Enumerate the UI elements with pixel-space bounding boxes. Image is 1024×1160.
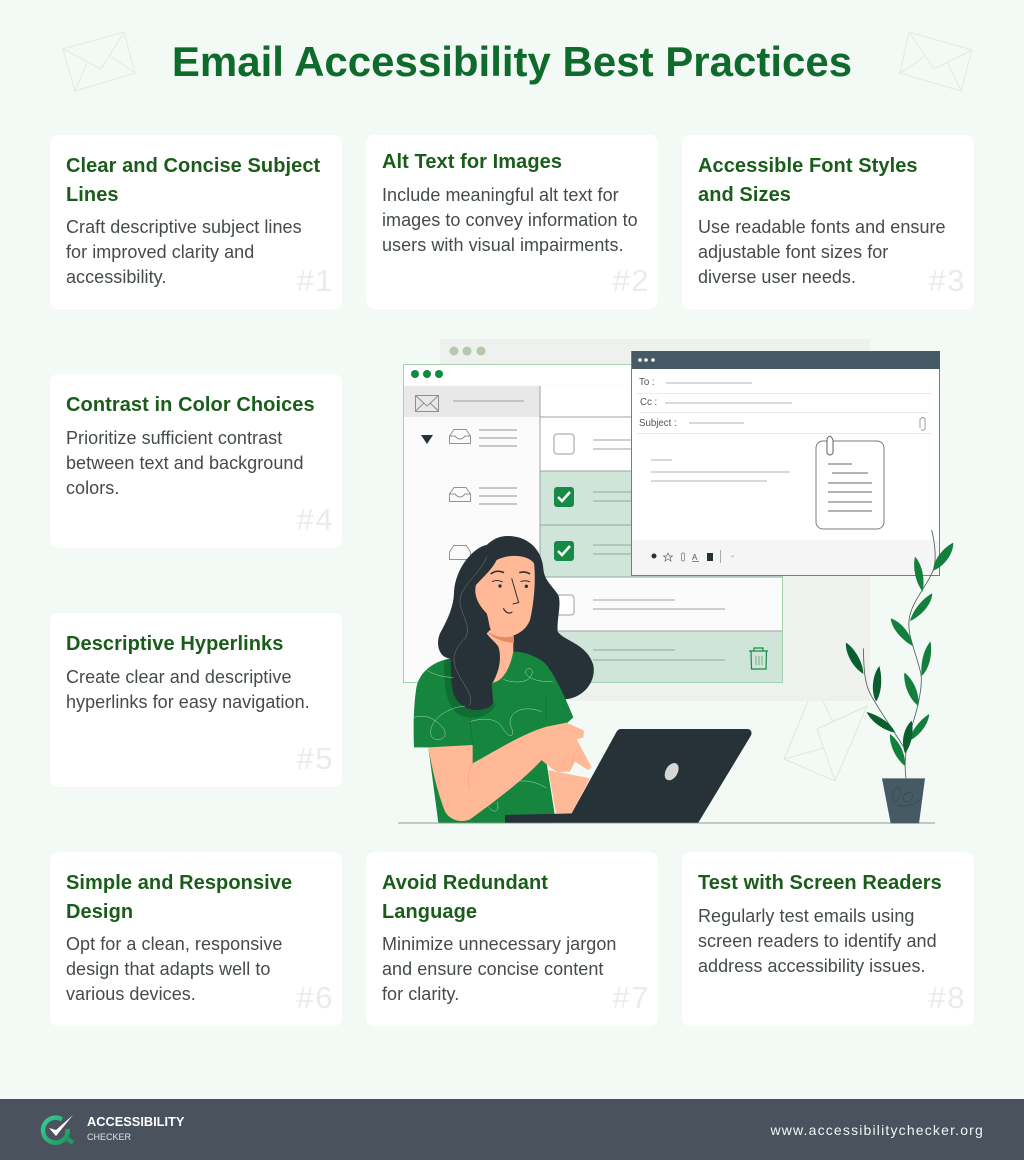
back forearm (548, 770, 590, 813)
card 8 number: #8 (929, 980, 966, 1015)
title: Email Accessibility Best Practices (172, 38, 852, 85)
footer bar (0, 1099, 1024, 1160)
card 4 number: #4 (297, 502, 334, 537)
neck shadow (487, 632, 514, 643)
panel: card 7 (366, 852, 658, 1026)
compose window: Subject : (639, 418, 677, 429)
card 5 number: #5 (297, 741, 334, 776)
neck (487, 630, 513, 683)
icon: envelope top right (900, 32, 972, 92)
shirt (414, 652, 573, 823)
logo wordmark: ACCESSIBILITY (87, 1114, 184, 1129)
card 3 heading: Accessible Font Styles (698, 155, 918, 177)
card 1 heading: Lines (66, 184, 119, 206)
card 3 body: diverse user needs. (698, 267, 856, 287)
compose toolbar: A (692, 553, 698, 562)
card 3 number: #3 (929, 263, 966, 298)
icon: trash (749, 648, 768, 669)
compose window: To : (639, 377, 655, 388)
main inbox window (404, 364, 782, 682)
rows lines (593, 440, 725, 660)
near arm (428, 723, 592, 821)
card 1 body: for improved clarity and (66, 242, 254, 262)
card 3 body (698, 217, 946, 287)
card 2 body: Include meaningful alt text for (382, 185, 619, 205)
website url: www.accessibilitychecker.org (770, 1122, 984, 1138)
card 6 body: design that adapts well to (66, 959, 270, 979)
card 6 number: #6 (297, 980, 334, 1015)
card 1 body (66, 217, 302, 287)
card 1 body: Craft descriptive subject lines (66, 217, 302, 237)
card 8 body (698, 906, 937, 976)
panel: card 1 (50, 135, 342, 309)
card 8 body: screen readers to identify and (698, 931, 937, 951)
card 3 body: Use readable fonts and ensure (698, 217, 946, 237)
card 6 body (66, 934, 282, 1004)
hair back (438, 536, 594, 711)
card 4 heading: Contrast in Color Choices (66, 394, 315, 416)
compose window (632, 351, 940, 576)
card 7 heading: Avoid Redundant (382, 872, 548, 894)
card 8 body: address accessibility issues. (698, 956, 926, 976)
checkbox checked (554, 541, 574, 561)
sidebar items (450, 430, 517, 560)
logo wordmark: CHECKER (87, 1132, 131, 1142)
icon: envelope top left (62, 32, 136, 92)
panel: card 4 (50, 374, 342, 548)
card 6 body: Opt for a clean, responsive (66, 934, 282, 954)
card 8 heading: Test with Screen Readers (698, 872, 942, 894)
checkbox empty (554, 434, 574, 454)
panel: card 5 (50, 613, 342, 787)
card 1 body: accessibility. (66, 267, 166, 287)
woman with laptop (414, 536, 752, 823)
card 3 body: adjustable font sizes for (698, 242, 888, 262)
face (475, 556, 535, 637)
card 7 heading (382, 872, 548, 923)
compose toolbar (652, 550, 734, 563)
card 7 body: Minimize unnecessary jargon (382, 934, 616, 954)
card 4 body (66, 428, 304, 498)
card 7 number: #7 (613, 980, 650, 1015)
back window (440, 339, 870, 701)
panel: card 3 (682, 135, 974, 309)
card 1 heading (66, 155, 320, 206)
card 3 heading (698, 155, 918, 206)
card 5 body: hyperlinks for easy navigation. (66, 692, 310, 712)
card 6 heading: Design (66, 901, 133, 923)
card 7 body (382, 934, 616, 1004)
card 4 body: colors. (66, 478, 119, 498)
icon: triangle (421, 435, 433, 444)
card 3 heading: and Sizes (698, 184, 791, 206)
ground line (398, 822, 935, 824)
paperclip (920, 418, 925, 430)
card 6 body: various devices. (66, 984, 196, 1004)
attached document (816, 436, 884, 529)
checkbox empty (554, 595, 574, 615)
panel: card 6 (50, 852, 342, 1026)
card 6 heading (66, 872, 292, 923)
icon: mail (416, 396, 438, 412)
hair strand (454, 557, 487, 707)
checkbox checked (554, 487, 574, 507)
panel: card 8 (682, 852, 974, 1026)
card 7 body: and ensure concise content (382, 959, 603, 979)
card 2 body: users with visual impairments. (382, 235, 624, 255)
faint envelope behind plant (784, 701, 867, 781)
hair shadow on shirt (444, 658, 496, 718)
card 8 body: Regularly test emails using (698, 906, 914, 926)
card 1 number: #1 (297, 263, 334, 298)
plant pot (882, 778, 925, 823)
face details (491, 571, 530, 613)
card 7 heading: Language (382, 901, 477, 923)
card 5 heading: Descriptive Hyperlinks (66, 633, 283, 655)
sleeve seams and shirt pattern (414, 669, 553, 811)
compose window: Cc : (640, 397, 657, 408)
card 6 heading: Simple and Responsive (66, 872, 292, 894)
card 2 body (382, 185, 638, 255)
logo icon (40, 1115, 74, 1145)
card 2 heading: Alt Text for Images (382, 151, 562, 173)
plant (846, 530, 953, 823)
card 5 body: Create clear and descriptive (66, 667, 292, 687)
laptop logo (662, 761, 682, 783)
card 5 body (66, 667, 310, 712)
card 1 heading: Clear and Concise Subject (66, 155, 320, 177)
card 4 body: Prioritize sufficient contrast (66, 428, 282, 448)
laptop (505, 729, 752, 823)
card 2 body: images to convey information to (382, 210, 638, 230)
panel: card 2 (366, 135, 658, 309)
logo wordmark (87, 1114, 184, 1142)
card 2 number: #2 (613, 263, 650, 298)
card 7 body: for clarity. (382, 984, 459, 1004)
card 4 body: between text and background (66, 453, 304, 473)
